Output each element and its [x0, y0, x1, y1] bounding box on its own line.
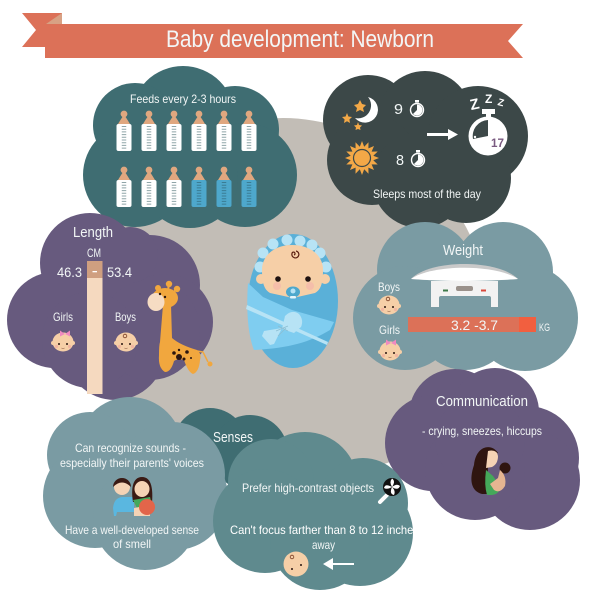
total hours: 17	[491, 136, 504, 150]
icon: boy face	[114, 332, 138, 352]
icon: girl face	[378, 340, 402, 360]
arrow	[427, 129, 458, 140]
panel: senses left	[43, 397, 228, 570]
boys label: Boys	[378, 280, 400, 294]
focus text: Can't focus farther than 8 to 12 inches	[230, 523, 419, 537]
icon: lollipop	[380, 478, 401, 502]
icon: moon and stars	[342, 97, 378, 130]
background blob	[120, 118, 481, 470]
icon: stopwatch night	[410, 100, 424, 116]
arrow	[323, 558, 354, 570]
icon: scale	[411, 264, 518, 307]
communication text: - crying, sneezes, hiccups	[422, 424, 542, 438]
senses heading: Senses	[213, 429, 253, 446]
icon: girl face	[51, 330, 75, 352]
weight value: 3.2 -3.7	[451, 317, 498, 333]
contrast text: Prefer high-contrast objects	[242, 481, 374, 495]
panel: weight	[353, 222, 578, 371]
icon: family	[113, 477, 155, 516]
icon: mother and baby	[471, 447, 510, 495]
boys length value: 53.4	[107, 264, 132, 280]
panel: communication	[385, 368, 580, 530]
panel: length	[7, 213, 213, 400]
length heading: Length	[73, 224, 113, 241]
night hours: 9	[394, 101, 403, 118]
smell text line two: of smell	[113, 537, 151, 551]
icon: giraffe	[148, 281, 212, 374]
icon: zzz	[468, 92, 505, 114]
weight heading: Weight	[443, 242, 484, 259]
smell text: Have a well-developed sense	[65, 523, 199, 537]
weight unit: KG	[539, 322, 550, 334]
girls label: Girls	[53, 310, 73, 324]
panel: senses backing	[173, 408, 288, 491]
girls label: Girls	[379, 323, 400, 337]
panel: sleep	[323, 71, 528, 228]
day hours: 8	[396, 152, 404, 169]
height bar	[87, 261, 102, 394]
communication heading: Communication	[436, 393, 528, 410]
icon: baby face side	[284, 552, 308, 576]
feeding heading: Feeds every 2-3 hours	[130, 92, 236, 106]
icon: boy face	[377, 296, 401, 314]
sleep caption: Sleeps most of the day	[373, 187, 481, 201]
icon: zzz: Z	[485, 92, 492, 106]
boys label: Boys	[115, 310, 136, 324]
sounds text line two: especially their parents' voices	[60, 456, 204, 470]
panel: feeding	[83, 66, 297, 228]
sounds text: Can recognize sounds -	[75, 441, 186, 455]
focus text line two: away	[312, 538, 335, 552]
panel: senses vision	[213, 432, 419, 590]
title banner	[22, 13, 523, 58]
title: Baby development: Newborn	[166, 26, 434, 53]
icon: large timer	[468, 109, 508, 156]
icon: zzz: Z	[496, 97, 505, 109]
icon: swaddled baby	[246, 234, 338, 368]
girls length value: 46.3	[57, 264, 82, 280]
unit label: CM	[87, 246, 101, 260]
icon: zzz: Z	[468, 96, 481, 114]
weight bar	[408, 317, 536, 332]
bottles grid	[116, 111, 256, 207]
icon: sun	[345, 141, 379, 175]
icon: stopwatch day	[412, 150, 424, 166]
